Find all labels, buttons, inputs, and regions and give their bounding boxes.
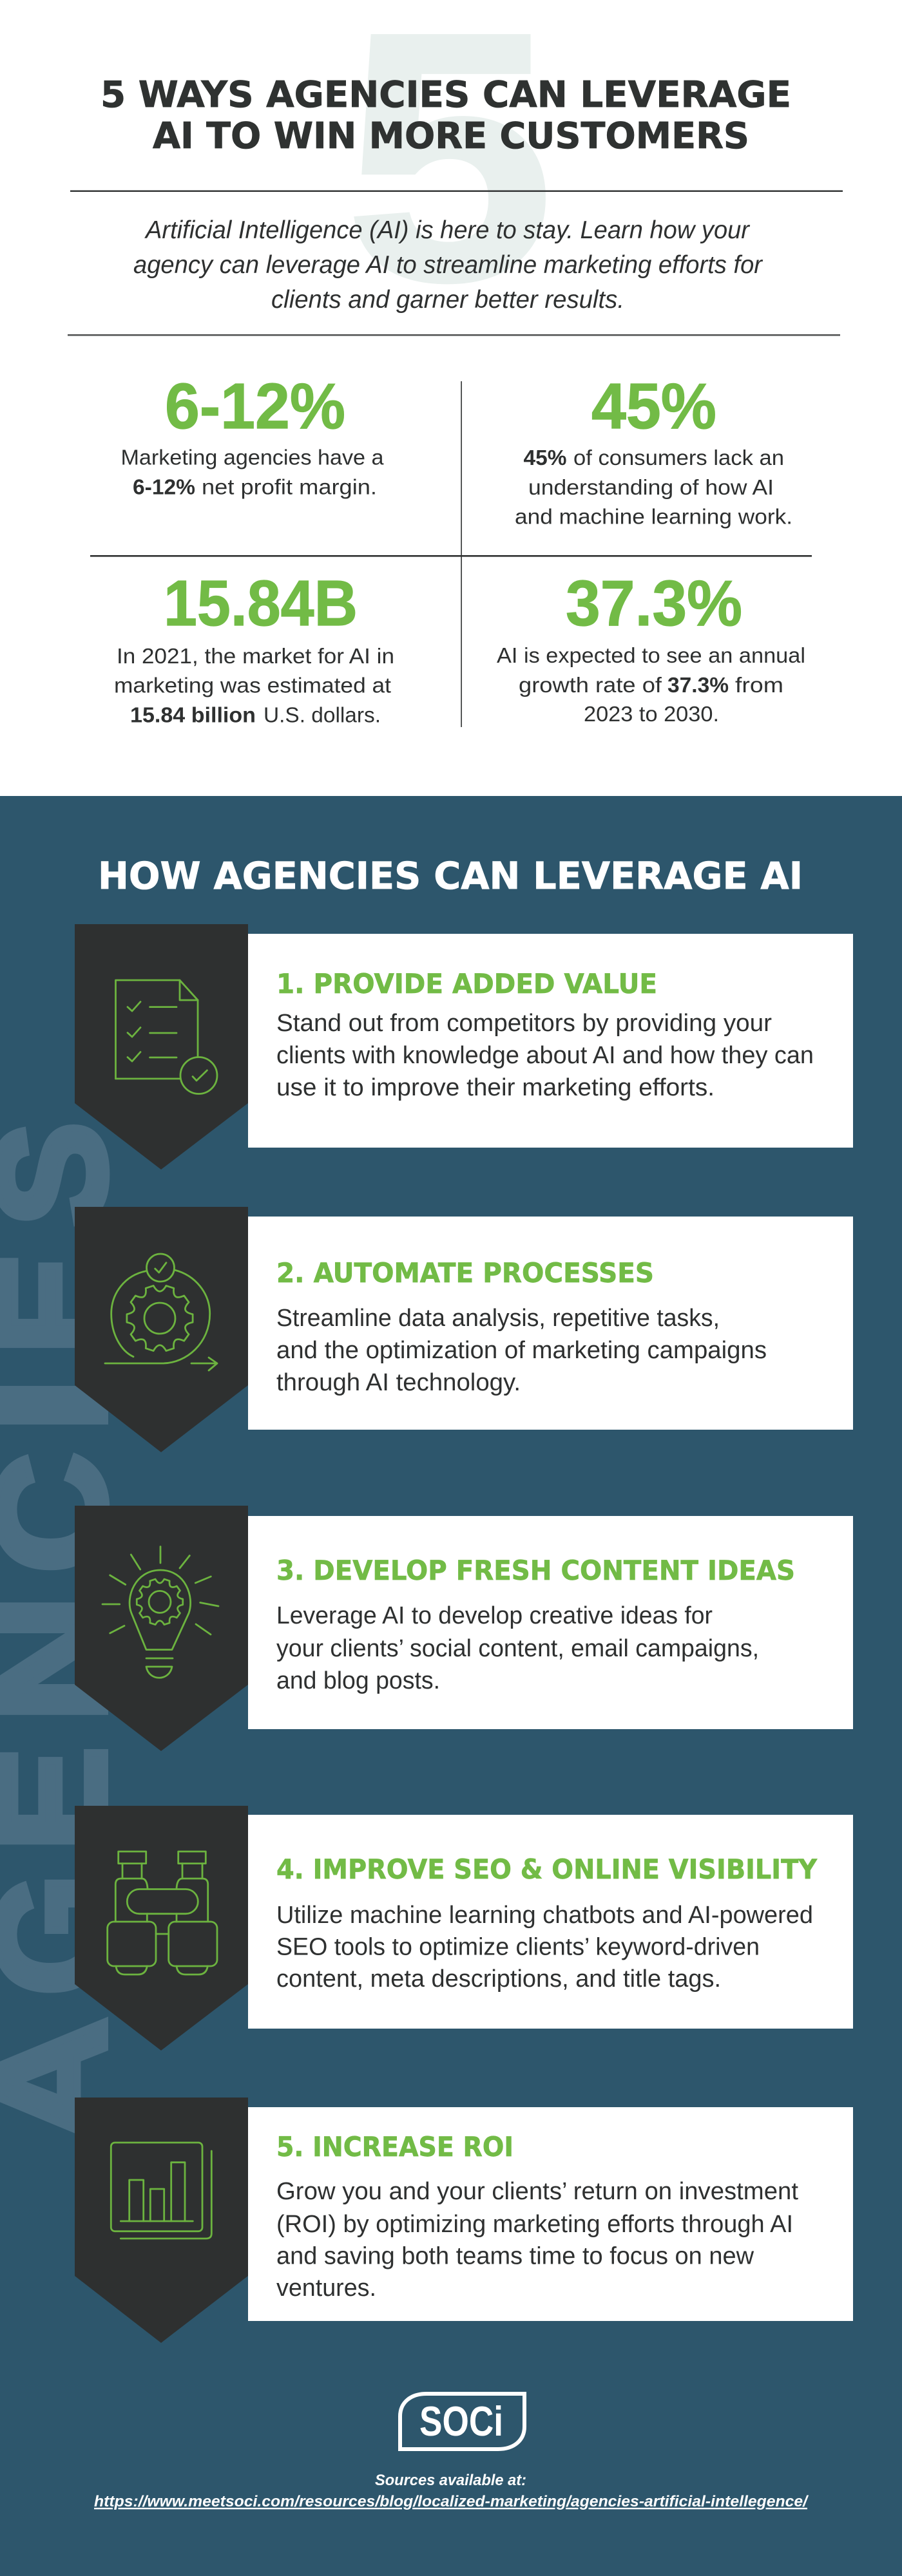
step 2 heading: 2. AUTOMATE PROCESSES (276, 1257, 654, 1289)
sources: Sources available at: (375, 2472, 526, 2489)
panel: step 5 increase ROI (75, 2098, 853, 2343)
stat: 37.3%: 37.3% (566, 567, 742, 639)
stat: 37.3%: 37.3% (667, 673, 729, 697)
logo: SOCi (400, 2394, 524, 2449)
icon: checklist document (116, 980, 217, 1094)
step 4 description: content, meta descriptions, and title tags. (276, 1965, 721, 1993)
panel: step 4 improve SEO and online visibility (75, 1806, 853, 2050)
stat: 45%: 45% (523, 446, 567, 469)
stat: 45%: of consumers lack an (573, 446, 784, 469)
step 5 description: Grow you and your clients’ return on investment (276, 2178, 798, 2205)
stat: 45%: and machine learning work. (515, 505, 792, 529)
step 4 description: SEO tools to optimize clients’ keyword-driven (276, 1933, 760, 1960)
stat: 45% (515, 370, 792, 529)
step 5 shield (75, 2098, 248, 2343)
sources (94, 2472, 809, 2510)
stat: 15.84B: marketing was estimated at (114, 674, 391, 697)
stat: 37.3%: 2023 to 2030. (584, 702, 719, 726)
stat: 15.84B (114, 567, 394, 727)
step 3 shield (75, 1506, 248, 1751)
logo: SOCi: SOCi (419, 2398, 503, 2445)
step 5 description: ventures. (276, 2275, 376, 2302)
icon: binoculars (108, 1852, 217, 1975)
stat: 37.3%: from (735, 673, 783, 697)
icon: gear with loop arrow (105, 1254, 217, 1370)
step 5 description: (ROI) by optimizing marketing efforts through AI (276, 2211, 793, 2238)
step 5 description: and saving both teams time to focus on new (276, 2242, 754, 2269)
step 3 description: your clients’ social content, email campaigns, (276, 1635, 759, 1662)
step 4 shield (75, 1806, 248, 2050)
step 4 description (276, 1902, 813, 1993)
step 3 description: Leverage AI to develop creative ideas for (276, 1602, 713, 1629)
stat: 15.84B: In 2021, the market for AI in (117, 644, 394, 668)
step 4 description: Utilize machine learning chatbots and AI-powered (276, 1902, 813, 1929)
step 5 heading: 5. INCREASE ROI (276, 2131, 513, 2163)
stat: 6-12%: net profit margin. (202, 475, 377, 499)
panel: step 2 automate processes (75, 1207, 853, 1452)
step 2 description: through AI technology. (276, 1369, 521, 1396)
title (101, 74, 791, 157)
intro text: agency can leverage AI to streamline marketing efforts for (133, 251, 763, 279)
step 1 description (276, 1010, 814, 1101)
step 1 description: Stand out from competitors by providing your (276, 1010, 772, 1037)
panel: step 1 provide added value (75, 924, 853, 1170)
step 2 shield (75, 1207, 248, 1452)
step 3 description: and blog posts. (276, 1667, 440, 1694)
step 3 heading: 3. DEVELOP FRESH CONTENT IDEAS (276, 1555, 795, 1586)
intro text: clients and garner better results. (271, 286, 624, 314)
panel: how agencies can leverage AI background (0, 796, 902, 2576)
step 5 description (276, 2178, 798, 2302)
step 1 description: clients with knowledge about AI and how they can (276, 1042, 814, 1069)
section heading: HOW AGENCIES CAN LEVERAGE AI (98, 854, 803, 898)
intro text (133, 216, 763, 314)
decorative vertical word AGENCIES (0, 1122, 138, 2146)
stat: 6-12%: 6-12% (133, 475, 195, 499)
icon: light bulb with gear (102, 1547, 218, 1678)
step 2 description (276, 1305, 767, 1396)
stat: 6-12%: Marketing agencies have a (121, 446, 384, 469)
title: 5 WAYS AGENCIES CAN LEVERAGE (101, 74, 791, 116)
stat: 6-12%: 6-12% (165, 370, 345, 442)
step 1 shield (75, 924, 248, 1170)
step 4 heading: 4. IMPROVE SEO & ONLINE VISIBILITY (276, 1853, 818, 1885)
stat: 15.84B: 15.84B (164, 567, 358, 639)
stat: 15.84B: 15.84 billion (130, 703, 256, 727)
title: AI TO WIN MORE CUSTOMERS (153, 115, 749, 157)
stat: 37.3% (497, 567, 805, 726)
step 2 description: and the optimization of marketing campaigns (276, 1337, 767, 1364)
sources: https://www.meetsoci.com/resources/blog/localized-marketing/agencies-artificial-intellegence/ (94, 2493, 809, 2510)
icon: bar chart (111, 2143, 211, 2239)
step 1 description: use it to improve their marketing efforts. (276, 1074, 715, 1101)
step 1 heading: 1. PROVIDE ADDED VALUE (276, 968, 657, 999)
stat: 6-12% (121, 370, 384, 499)
stat: 15.84B: U.S. dollars. (264, 703, 381, 727)
step 2 description: Streamline data analysis, repetitive tasks, (276, 1305, 720, 1332)
stat: 45%: 45% (591, 370, 716, 442)
stat: 37.3%: AI is expected to see an annual (497, 643, 805, 667)
step 3 description (276, 1602, 759, 1694)
panel: step 3 develop fresh content ideas (75, 1506, 853, 1751)
stat: 37.3%: growth rate of (519, 673, 662, 697)
stat: 45%: understanding of how AI (528, 475, 774, 499)
intro text: Artificial Intelligence (AI) is here to stay. Learn how your (144, 216, 751, 244)
